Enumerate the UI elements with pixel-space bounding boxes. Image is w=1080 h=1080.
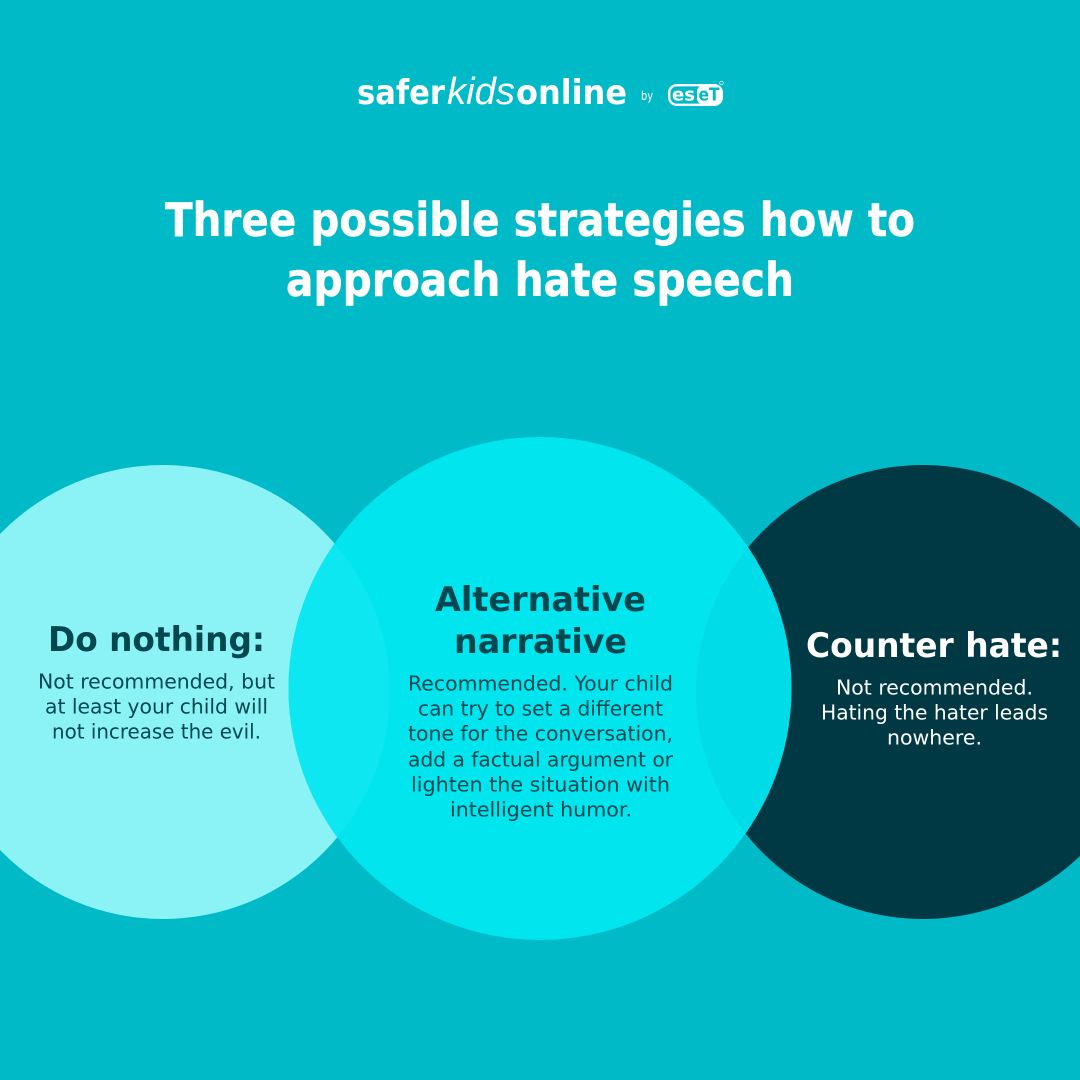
body: counter hate: Hating the hater leads [821, 700, 1048, 724]
body: alternative narrative: can try to set a different [418, 696, 663, 720]
body: counter hate: Not recommended. [836, 676, 1033, 700]
body: alternative narrative: add a factual argument or [408, 748, 674, 772]
panel: alternative narrative circle [288, 437, 792, 940]
logo: saferkidsonline by ESET: eT [698, 84, 720, 106]
body: alternative narrative: lighten the situation with [411, 772, 670, 796]
text: counter hate [806, 626, 1062, 750]
body: do nothing: not increase the evil. [52, 720, 261, 744]
body: alternative narrative: Recommended. Your child [408, 672, 673, 696]
logo: saferkidsonline by ESET: by [641, 88, 653, 103]
panel: do nothing circle [0, 465, 390, 919]
body: do nothing: Not recommended, but [38, 670, 275, 694]
body: do nothing: at least your child will [45, 694, 268, 718]
logo: saferkidsonline by ESET: kids [447, 71, 515, 113]
title: Three possible strategies how to [165, 193, 915, 247]
logo: saferkidsonline by ESET [357, 71, 723, 113]
heading: alternative narrative: narrative [454, 622, 627, 662]
logo: saferkidsonline by ESET: safer [357, 73, 445, 113]
logo: saferkidsonline by ESET: online [516, 73, 627, 113]
body: alternative narrative: intelligent humor. [450, 798, 632, 822]
heading: counter hate: Counter hate: [806, 626, 1062, 666]
title: approach hate speech [286, 253, 794, 307]
heading: do nothing: Do nothing: [48, 620, 265, 660]
text: alternative narrative [408, 580, 674, 822]
logo: saferkidsonline by ESET: es [672, 84, 695, 106]
body: alternative narrative [408, 672, 674, 822]
body: alternative narrative: tone for the conversation, [408, 722, 673, 746]
body: do nothing [38, 670, 275, 744]
title [165, 193, 915, 307]
body: counter hate [821, 676, 1048, 750]
heading: alternative narrative: Alternative [435, 580, 646, 620]
body: counter hate: nowhere. [887, 726, 982, 750]
panel: counter hate circle [696, 465, 1080, 919]
text: do nothing [38, 620, 275, 744]
heading: alternative narrative [435, 580, 646, 662]
